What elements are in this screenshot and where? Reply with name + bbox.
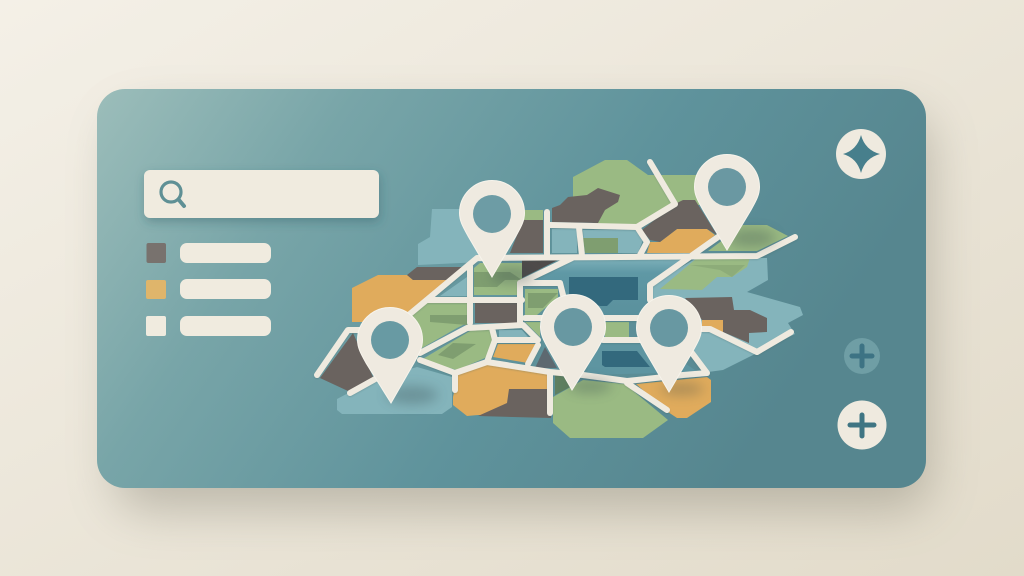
- dark green patches: [430, 238, 745, 395]
- legend swatch: gray: [146, 243, 166, 263]
- legend label bar 1: [180, 243, 271, 263]
- icon: four-point star: [843, 135, 880, 173]
- search bar: [144, 170, 379, 218]
- deep water: [569, 277, 650, 367]
- roads: [317, 162, 795, 413]
- card shadow: [115, 115, 930, 510]
- legend label bar 2: [180, 279, 271, 299]
- gray regions: [320, 188, 767, 418]
- pin shadows: [386, 229, 776, 404]
- pin 2: [694, 154, 760, 250]
- map: [317, 154, 803, 438]
- pin 3: [358, 308, 422, 403]
- icon: plus: [850, 415, 874, 436]
- water regions: [337, 209, 803, 414]
- orange regions: [352, 229, 723, 418]
- icon: plus: [852, 346, 872, 366]
- icon: magnifier: [161, 182, 184, 206]
- compass button: [836, 129, 886, 179]
- faded plus button: [844, 338, 880, 374]
- map regions: [320, 160, 803, 438]
- pin 4: [540, 294, 606, 390]
- legend swatch: cream: [146, 316, 166, 336]
- central water: [533, 258, 692, 318]
- legend: [146, 243, 271, 336]
- zoom plus button: [838, 400, 886, 450]
- pin 1: [460, 180, 524, 277]
- legend swatch: orange: [146, 280, 166, 299]
- map card panel: [97, 89, 926, 488]
- pin 5: [636, 296, 702, 392]
- green regions: [410, 160, 788, 438]
- legend label bar 3: [180, 316, 271, 336]
